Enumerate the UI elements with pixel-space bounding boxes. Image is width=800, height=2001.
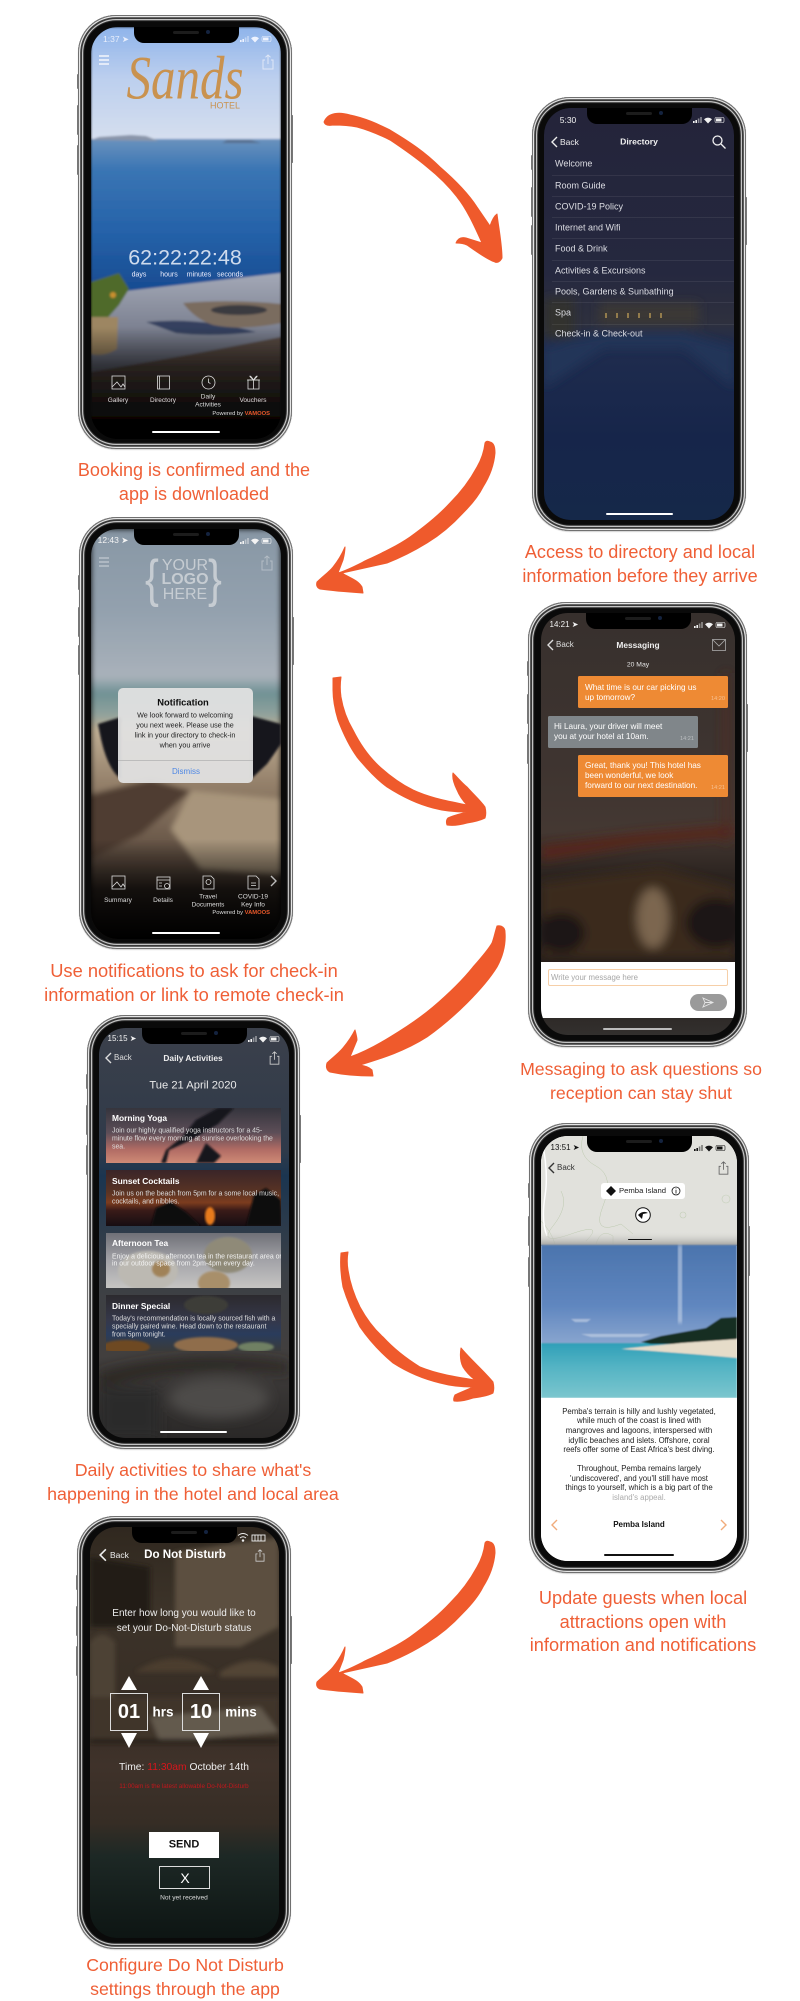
screen: do not disturb settings: set your Do-Not-Disturb status <box>117 1623 251 1634</box>
map callout: Pemba Island <box>619 1186 666 1195</box>
caption 5: Daily activities to share what's <box>75 1460 311 1480</box>
back link: Back <box>114 1053 132 1062</box>
carousel navigation: Pemba Island <box>613 1520 665 1529</box>
hours control <box>110 1676 148 1748</box>
icon: covid info <box>248 876 260 890</box>
message bubble: guest thanks: been wonderful, we look <box>585 771 673 780</box>
description text: mangroves and lagoons, interspersed with <box>566 1426 712 1435</box>
notification dialog: We look forward to welcoming <box>137 710 233 719</box>
description text: 'undiscovered', and you'll still have most <box>570 1474 708 1483</box>
screen: notification over beach <box>91 529 281 939</box>
notch <box>134 528 238 545</box>
home indicator <box>606 513 673 514</box>
icon: travel documents <box>202 876 214 890</box>
icon: details <box>156 876 170 890</box>
icon: search <box>712 135 726 149</box>
caption 6: Update guests when local <box>539 1588 747 1608</box>
icon: menu <box>99 55 109 65</box>
caption 3: information or link to remote check-in <box>44 984 344 1005</box>
screen: do not disturb settings <box>90 1527 279 1938</box>
background photo: sea and terrace <box>91 27 281 419</box>
caption 5: happening in the hotel and local area <box>47 1484 339 1504</box>
status icons <box>240 36 272 42</box>
card: Dinner Special <box>106 1295 281 1351</box>
card: Afternoon Tea: in our outdoor space from 2pm-4pm every day. <box>112 1261 255 1268</box>
message bubble: hotel reply: Hi Laura, your driver will meet <box>554 722 662 731</box>
caption 1: Booking is confirmed and the <box>78 460 310 480</box>
countdown labels: days <box>132 272 146 278</box>
notification dialog <box>118 688 253 783</box>
background photo: dim bridge <box>541 613 735 1035</box>
description text: reefs offer some of East Africa's best diving. <box>563 1445 715 1454</box>
directory list: Activities & Excursions <box>555 266 646 276</box>
icon: menu <box>99 557 109 567</box>
powered by: Powered by VAMOOS <box>212 910 270 916</box>
card: Afternoon Tea: Enjoy a delicious afternoon tea in the restaurant area or <box>112 1254 281 1261</box>
time line: Time: 11:30am October 14th <box>119 1762 249 1773</box>
card: Morning Yoga: minute flow every morning at sunrise overlooking the <box>112 1136 273 1143</box>
status bar: 12:43 ➤ <box>98 535 128 545</box>
card: Sunset Cocktails <box>106 1170 281 1226</box>
status icons <box>694 622 726 628</box>
caption 7: Configure Do Not Disturb <box>86 1955 284 1975</box>
back link: Back <box>560 137 579 147</box>
description text: while much of the coast is lined with <box>577 1416 701 1425</box>
countdown timer: 62:22:22:48 <box>128 245 242 269</box>
date: 20 May <box>627 662 649 669</box>
notification dialog: link in your directory to check-in <box>135 730 235 739</box>
caption 3: Use notifications to ask for check-in <box>50 960 338 981</box>
card: Sunset Cocktails: cocktails, and nibbles. <box>112 1199 179 1206</box>
icon: share <box>255 1549 265 1562</box>
notification dialog: Notification <box>157 696 209 707</box>
title: Do Not Disturb <box>144 1548 226 1561</box>
caption 2: Access to directory and local <box>525 542 755 562</box>
directory list: Room Guide <box>555 180 606 190</box>
directory list: COVID-19 Policy <box>555 202 623 212</box>
screen: notification over beach: Details <box>153 897 173 904</box>
card: Sunset Cocktails: Sunset Cocktails <box>112 1176 180 1186</box>
message bubble: hotel reply <box>548 716 698 748</box>
minutes control: 10 <box>190 1701 212 1723</box>
instructions: Enter how long you would like to <box>112 1608 256 1619</box>
send button: SEND <box>169 1838 199 1850</box>
screen: directory list <box>544 108 734 520</box>
card: Dinner Special: Today's recommendation is locally sourced fish with a <box>112 1316 275 1323</box>
screen: messaging <box>541 613 735 1035</box>
message bubble: guest question: What time is our car picking us <box>585 683 696 692</box>
caption 4: reception can stay shut <box>550 1083 732 1103</box>
background photo: sunglasses on sand <box>91 529 281 936</box>
cancel button: X <box>180 1870 190 1886</box>
caption 1: app is downloaded <box>119 484 269 504</box>
card: Afternoon Tea <box>106 1233 281 1288</box>
message bubble: guest thanks <box>578 755 728 797</box>
caption 2: information before they arrive <box>522 566 758 586</box>
directory list: Check-in & Check-out <box>555 328 643 338</box>
status bar: 15:15 ➤ <box>108 1034 136 1043</box>
back link <box>551 136 579 148</box>
arrow: step 1 to step 2 <box>324 113 502 262</box>
status icons <box>248 1036 280 1042</box>
notch <box>586 1135 692 1152</box>
screen: Pemba Island <box>541 1136 737 1561</box>
message bubble: guest thanks: Great, thank you! This hotel has <box>585 761 701 770</box>
placeholder logo: } <box>208 550 222 608</box>
icon: share <box>262 556 272 570</box>
minutes label: mins <box>225 1704 257 1719</box>
description text: things to yourself, which is a big part of the <box>565 1483 713 1492</box>
map and photo background <box>541 1136 737 1561</box>
directory list: Internet and Wifi <box>555 222 621 232</box>
tab labels: Summary <box>104 897 132 904</box>
screen: Sands hotel countdown <box>91 27 281 439</box>
card: Dinner Special: Dinner Special <box>112 1301 170 1311</box>
screen: Sands hotel countdown: seconds <box>217 272 243 278</box>
date: Tue 21 April 2020 <box>149 1079 237 1091</box>
back link <box>548 1162 580 1174</box>
screen: Sands hotel countdown: hours <box>160 272 178 278</box>
status icons <box>694 1145 726 1152</box>
description text: island's appeal. <box>612 1493 666 1502</box>
placeholder logo <box>145 550 222 608</box>
card: Morning Yoga: Join our highly qualified yoga instructors for a 45- <box>112 1128 262 1135</box>
screen: Sands hotel countdown: minutes <box>187 272 211 278</box>
caption 6 <box>530 1587 756 1658</box>
placeholder logo: HERE <box>163 586 207 603</box>
background: blurred lounge <box>99 1028 289 1438</box>
background photo: dimmed resort poolside <box>90 1527 279 1938</box>
status bar: 14:21 ➤ <box>550 620 578 629</box>
notification dialog: when you arrive <box>160 740 210 749</box>
notification dialog: you next week. Please use the <box>136 720 234 729</box>
notch <box>134 26 238 43</box>
powered by: Powered by VAMOOS <box>212 411 270 417</box>
icon: next chevron <box>270 876 277 886</box>
icon: vouchers <box>247 376 260 390</box>
arrow: step 2 to step 3 <box>317 441 495 593</box>
icon: directory <box>157 376 170 390</box>
message bubble: hotel reply: 14:21 <box>680 736 694 742</box>
home indicator <box>604 1554 674 1556</box>
message bubble: guest question: 14:20 <box>711 696 725 702</box>
map pin <box>635 1207 651 1223</box>
icon: share <box>270 1051 280 1065</box>
send button <box>149 1832 219 1858</box>
icon: wifi and battery <box>237 1532 267 1543</box>
screen: notification over beach: COVID-19 Key Info <box>238 893 268 908</box>
status icons <box>693 117 724 124</box>
screen: Sands hotel countdown: Directory <box>150 397 176 404</box>
minutes control <box>182 1676 220 1748</box>
phone 5: daily activities <box>87 1015 300 1449</box>
message composer panel <box>541 962 735 1018</box>
description text: idyllic beaches and islets. Offshore, coral <box>568 1436 710 1445</box>
card: Sunset Cocktails: Join us on the beach from 5pm for a some local music, <box>112 1191 279 1198</box>
caption 5 <box>47 1460 339 1504</box>
back link: Back <box>556 640 574 649</box>
card: Morning Yoga: Morning Yoga <box>112 1113 167 1123</box>
icon: summary <box>112 876 126 890</box>
back link <box>105 1052 132 1064</box>
phone 3: notification <box>79 517 293 949</box>
hours label: hrs <box>152 1704 174 1719</box>
card: Afternoon Tea: Afternoon Tea <box>112 1238 168 1248</box>
arrow: step 4 to step 5 <box>326 926 505 1076</box>
arrow: step 5 to step 6 <box>341 1252 494 1401</box>
phone 4: messaging <box>528 602 747 1047</box>
phone 1: home screen <box>78 15 292 449</box>
card: Morning Yoga: sea. <box>112 1144 125 1151</box>
home indicator <box>152 431 220 432</box>
directory list <box>552 158 734 338</box>
description text: Throughout, Pemba remains largely <box>577 1464 701 1473</box>
card: Dinner Special: specially paired wine. Head down to the restaurant <box>112 1324 266 1331</box>
directory list: Welcome <box>555 158 592 168</box>
caption 7: settings through the app <box>90 1979 280 1999</box>
hotel logo: Sands: Sands <box>126 44 244 112</box>
card: Morning Yoga <box>106 1108 281 1163</box>
icon: share <box>718 1161 729 1175</box>
icon: envelope <box>712 639 726 651</box>
map callout <box>601 1183 685 1199</box>
notch <box>132 1526 237 1543</box>
caption 4 <box>520 1059 762 1103</box>
caption 2 <box>522 542 758 586</box>
caption 6: information and notifications <box>530 1635 756 1655</box>
caption 6: attractions open with <box>560 1612 726 1632</box>
arrow: step 3 to step 4 <box>333 677 486 825</box>
text input: Write your message here <box>551 973 638 982</box>
home indicator <box>152 932 220 934</box>
notification dialog: Dismiss <box>172 767 200 776</box>
screen: notification over beach: Travel Documents <box>192 893 224 908</box>
back link <box>99 1548 133 1562</box>
title: Daily Activities <box>163 1053 223 1063</box>
message bubble: hotel reply: you at your hotel at 10am. <box>554 732 649 741</box>
text input <box>548 969 728 986</box>
caption 1 <box>78 460 310 504</box>
status bar: 13:51 ➤ <box>551 1143 579 1152</box>
status note: Not yet received <box>160 1895 208 1902</box>
title: Directory <box>620 137 658 147</box>
phone 2: directory <box>532 97 746 531</box>
screen: daily activities <box>99 1028 289 1438</box>
caption 7 <box>86 1954 284 2001</box>
back link: Back <box>110 1550 129 1560</box>
home indicator <box>603 1028 672 1030</box>
send button <box>690 994 727 1011</box>
message bubble: guest question <box>578 676 728 708</box>
cancel button <box>159 1866 210 1889</box>
arrow: step 6 to step 7 <box>317 1541 495 1693</box>
icon: gallery <box>112 376 126 390</box>
hours control: 01 <box>118 1701 140 1723</box>
directory list: Spa <box>555 308 571 318</box>
card: Dinner Special: from 5pm tonight. <box>112 1332 166 1339</box>
notch <box>142 1027 246 1044</box>
description text <box>549 1406 729 1504</box>
placeholder logo: { <box>145 550 159 608</box>
carousel navigation <box>541 1517 737 1533</box>
caption 3 <box>44 960 344 1005</box>
phone 6: local attraction <box>529 1123 749 1573</box>
hotel logo sub-line: HOTEL <box>210 100 240 110</box>
phone 7: do not disturb <box>77 1516 291 1949</box>
status bar: 1:37 ➤ <box>103 34 129 44</box>
caption 4: Messaging to ask questions so <box>520 1059 762 1079</box>
notch <box>586 107 692 124</box>
tab labels: Gallery <box>108 397 128 404</box>
drawer handle <box>628 1238 652 1240</box>
message bubble: guest thanks: forward to our next destination. <box>585 781 697 790</box>
message bubble: guest thanks: 14:21 <box>711 785 725 791</box>
notch <box>586 612 690 629</box>
home indicator <box>160 1431 227 1432</box>
back link <box>547 640 574 650</box>
placeholder logo: YOUR <box>162 557 208 574</box>
screen: Sands hotel countdown: Daily Activities <box>195 394 221 408</box>
description text: Pemba's terrain is hilly and lushly vegetated, <box>562 1407 716 1416</box>
icon: share <box>262 54 274 70</box>
message bubble: guest question: up tomorrow? <box>585 693 635 702</box>
directory list: Food & Drink <box>555 244 608 254</box>
icon: daily activities <box>202 376 216 390</box>
status bar: 5:30 <box>560 115 576 125</box>
title: Messaging <box>616 640 660 650</box>
warning: 11:00am is the latest allowable Do-Not-Disturb <box>119 1783 249 1790</box>
background: dim pool photo <box>544 108 734 520</box>
back link: Back <box>557 1163 575 1172</box>
directory list: Pools, Gardens & Sunbathing <box>555 286 674 296</box>
status icons <box>240 538 272 544</box>
placeholder logo: LOGO <box>161 571 209 588</box>
screen: Sands hotel countdown: Vouchers <box>239 397 267 404</box>
